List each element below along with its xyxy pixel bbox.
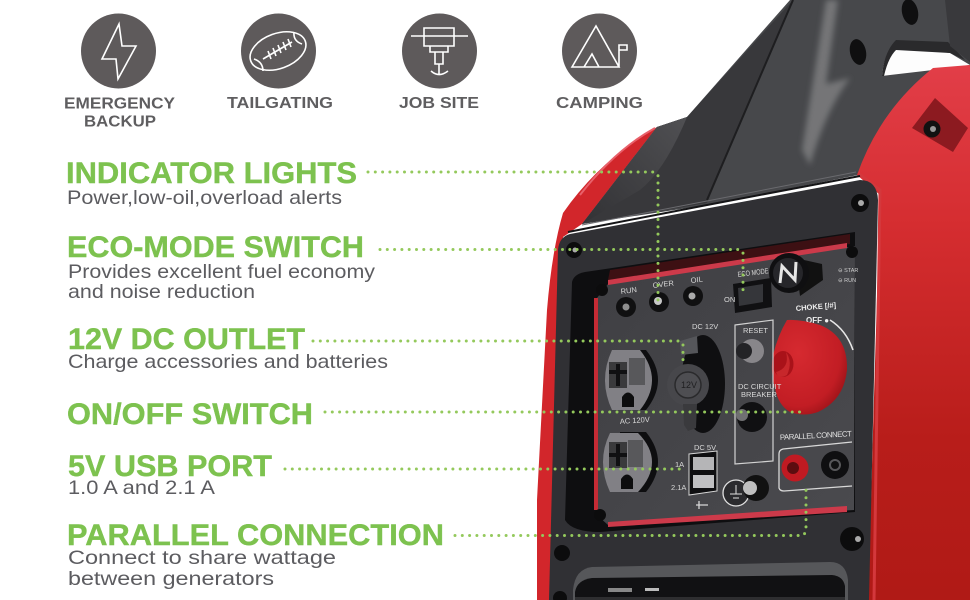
red on/off knob — [772, 316, 853, 414]
AC 120V label: AC 120V — [620, 415, 650, 426]
parallel connect: PARALLEL CONNECT — [780, 429, 852, 442]
reset and breaker panel: RESET — [743, 326, 768, 335]
feature: 5V USB port: 1.0 A and 2.1 A — [68, 477, 215, 499]
feature: parallel connection — [67, 519, 444, 590]
screws — [553, 194, 869, 600]
AC outlet upper — [605, 350, 658, 410]
feature: parallel connection: PARALLEL CONNECTION — [67, 519, 444, 552]
icon: camping tent — [562, 14, 637, 88]
label: emergency backup: BACKUP — [84, 114, 156, 130]
feature: 12V DC outlet: Charge accessories and batteries — [68, 351, 388, 373]
LED labels: OIL — [690, 275, 703, 285]
dotted leader: eco-mode switch — [380, 250, 743, 290]
dotted leader: USB — [285, 468, 686, 470]
USB port: 2.1A — [671, 483, 686, 492]
feature: parallel connection: Connect to share wattage — [68, 547, 336, 569]
panel frame — [549, 180, 878, 600]
red on/off knob: OFF ● — [806, 316, 829, 325]
label: tailgating: TAILGATING — [227, 95, 333, 112]
icon: job site drill — [402, 14, 477, 88]
LED labels — [620, 275, 703, 296]
red right side — [857, 65, 970, 600]
dotted leader: 12V DC outlet — [313, 341, 683, 363]
label: emergency backup: EMERGENCY — [64, 96, 176, 112]
red side recess — [912, 98, 968, 152]
feature: eco-mode switch: Provides excellent fuel economy — [68, 261, 375, 283]
USB port: 1A — [675, 460, 684, 469]
USB port: DC 5V — [694, 443, 716, 452]
vent — [573, 562, 848, 600]
12V DC socket: 12V — [681, 380, 697, 390]
feature: 5V USB port — [68, 450, 272, 499]
feature: on/off switch: ON/OFF SWITCH — [67, 398, 313, 431]
eco mode switch: ECO MODE — [737, 266, 769, 279]
label: camping: CAMPING — [556, 95, 643, 112]
feature: eco-mode switch — [67, 231, 375, 303]
reset and breaker panel: DC CIRCUIT — [738, 382, 782, 391]
reset and breaker panel — [735, 320, 782, 464]
feature: 5V USB port: 5V USB PORT — [68, 450, 272, 483]
red left side — [537, 127, 657, 600]
icon: emergency backup — [81, 14, 156, 88]
red trim bottom — [608, 506, 847, 527]
feature: 12V DC outlet: 12V DC OUTLET — [68, 323, 305, 356]
feature: indicator lights: Power,low-oil,overload alerts — [67, 187, 342, 209]
eco knob: ⊖ STAR — [838, 268, 858, 274]
ground terminal — [723, 475, 769, 506]
feature: indicator lights: INDICATOR LIGHTS — [66, 157, 357, 190]
LED indicators — [616, 286, 703, 317]
icon: football — [241, 14, 316, 88]
AC outlet lower — [603, 432, 658, 492]
handle holes — [847, 38, 869, 66]
generator body — [537, 0, 970, 600]
USB port — [671, 443, 717, 509]
feature: eco-mode switch: and noise reduction — [68, 281, 255, 303]
12V DC socket — [667, 322, 725, 433]
handle window — [882, 46, 970, 76]
label: job site: JOB SITE — [399, 95, 479, 112]
dotted leader: indicator lights — [368, 172, 658, 300]
parallel connect — [779, 429, 852, 491]
feature: 12V DC outlet — [68, 323, 388, 373]
red trim top — [608, 243, 847, 285]
eco mode switch — [724, 266, 772, 313]
dotted leader: on/off switch — [325, 410, 802, 414]
eco knob: ⊖ RUN — [838, 278, 856, 284]
dotted leader: parallel connection — [455, 490, 806, 536]
eco knob — [769, 253, 858, 296]
eco mode switch: ON — [724, 295, 735, 304]
feature: indicator lights — [66, 157, 357, 209]
feature: parallel connection: between generators — [68, 568, 274, 590]
12V DC socket: DC 12V — [692, 322, 718, 331]
feature: eco-mode switch: ECO-MODE SWITCH — [67, 231, 364, 264]
LED labels: OVER — [652, 278, 675, 290]
grey control plate — [597, 246, 855, 525]
handle highlights — [802, 0, 850, 165]
dark grey handle and top shell — [582, 0, 970, 224]
choke label: CHOKE [/#] — [795, 300, 837, 313]
LED labels: RUN — [620, 285, 637, 296]
red trim left — [594, 298, 598, 510]
label: emergency backup — [64, 96, 176, 130]
handle seam — [707, 0, 793, 200]
reset and breaker panel: BREAKER — [741, 390, 777, 399]
recess — [565, 232, 855, 532]
